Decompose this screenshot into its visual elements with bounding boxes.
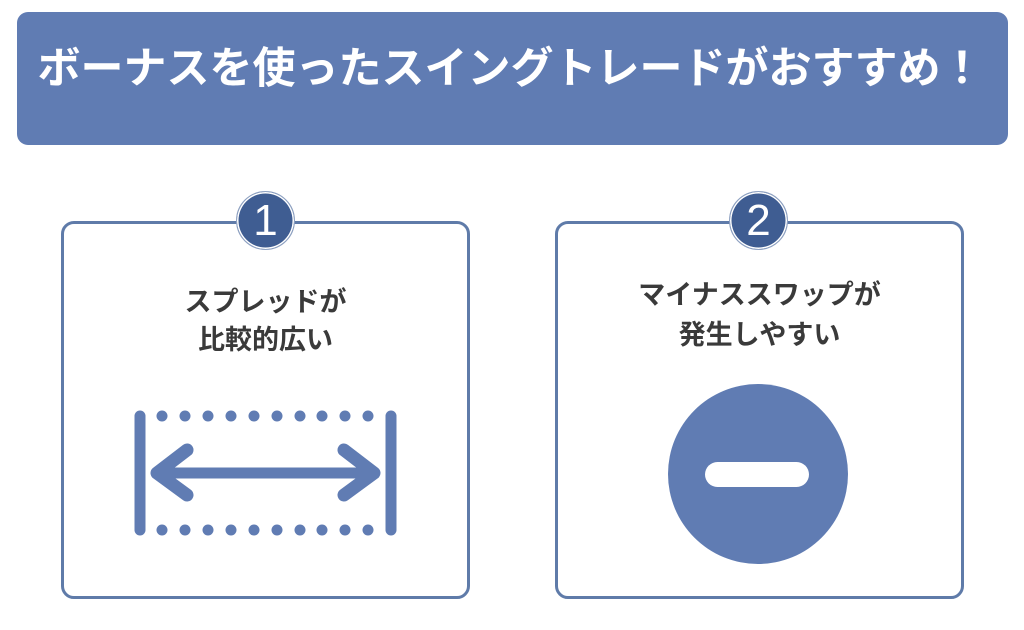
- panel: negative swap: [555, 221, 964, 599]
- panel 1 heading: スプレッドが: [184, 287, 346, 317]
- number badge 1: [236, 191, 295, 250]
- panel 1 heading: [184, 287, 346, 355]
- number badge 1: 1: [253, 196, 278, 245]
- title text: ボーナスを使ったスイングトレードがおすすめ！: [38, 45, 984, 93]
- icon: spread arrow between bars: [134, 410, 396, 536]
- panel 2 heading: 発生しやすい: [679, 320, 840, 350]
- panel 2 heading: [638, 280, 881, 350]
- icon: minus circle: [668, 384, 848, 564]
- panel: wide spread: [61, 221, 470, 599]
- panel 2 heading: マイナススワップが: [638, 280, 881, 310]
- number badge 2: [729, 191, 788, 250]
- title banner: [17, 12, 1008, 145]
- number badge 2: 2: [746, 196, 771, 245]
- panel 1 heading: 比較的広い: [198, 325, 333, 355]
